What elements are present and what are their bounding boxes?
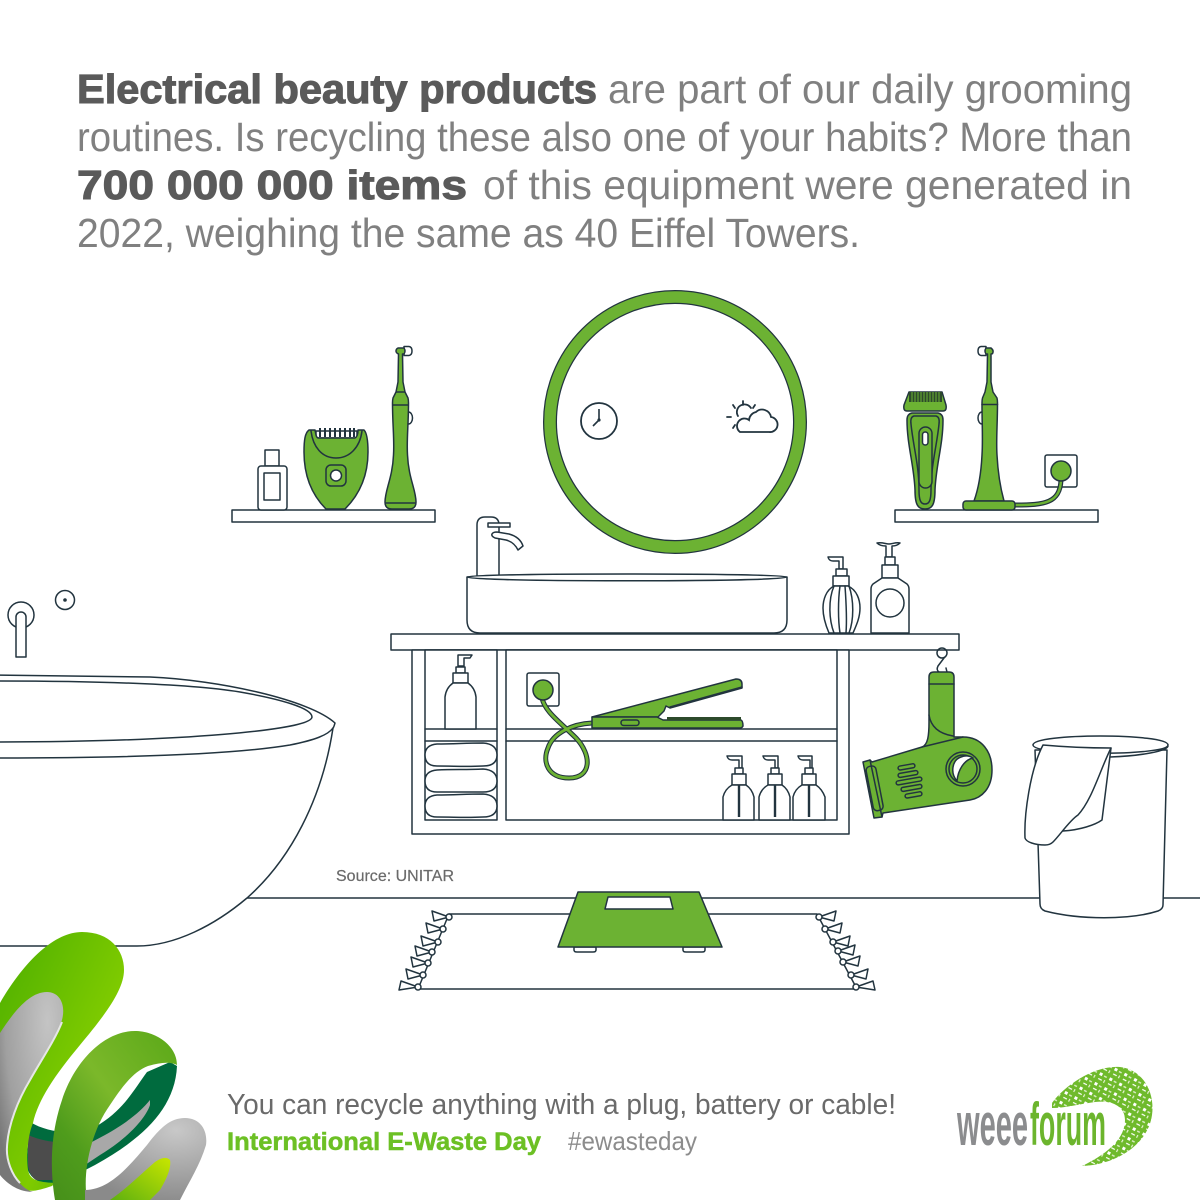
swirl: lower gray ribbon xyxy=(85,1118,206,1200)
heading text: are part of our daily grooming xyxy=(608,66,1132,112)
e-waste day swirl emblem xyxy=(0,932,206,1200)
swirl: large green ribbon xyxy=(0,932,124,1191)
pump bottle xyxy=(871,543,909,633)
heading text: of this equipment were generated in xyxy=(483,162,1132,208)
bath knob xyxy=(56,590,74,610)
footer message: You can recycle anything with a plug, battery or cable! xyxy=(227,1089,896,1121)
weeeforum logo: weee xyxy=(957,1091,1028,1158)
icon: sun and cloud xyxy=(727,401,778,432)
swirl: gray ribbon inside xyxy=(85,1100,150,1165)
towels xyxy=(425,743,497,817)
campaign name: International E-Waste Day xyxy=(227,1128,541,1156)
hashtag: #ewasteday xyxy=(568,1126,697,1156)
socket in cabinet xyxy=(527,673,559,706)
toothbrush left xyxy=(385,346,416,509)
left shelf xyxy=(232,510,435,522)
hair straightener xyxy=(533,679,743,778)
toothbrush on charger xyxy=(963,346,1015,510)
heading text: 2022, weighing the same as 40 Eiffel Towers. xyxy=(77,210,860,256)
epilator xyxy=(304,428,368,509)
swirl: large gray inner xyxy=(0,992,63,1192)
heading text: 700 000 000 items xyxy=(77,162,467,208)
shaver xyxy=(904,392,946,509)
bathtub xyxy=(0,675,335,946)
hair dryer xyxy=(863,648,992,818)
bathroom scale xyxy=(558,892,722,952)
mirror xyxy=(550,297,800,547)
three pump bottles xyxy=(723,756,825,820)
text: forum xyxy=(1030,1091,1106,1158)
rug xyxy=(399,911,875,990)
logo: mosaic crescent xyxy=(1052,1067,1153,1166)
floor line xyxy=(247,897,1200,899)
countertop xyxy=(391,634,959,650)
socket right xyxy=(1045,455,1077,487)
ribbed soap dispenser xyxy=(823,557,860,633)
basin faucet xyxy=(477,517,523,576)
power cable right xyxy=(1015,461,1071,505)
right shelf xyxy=(895,510,1098,522)
cabinet xyxy=(412,650,849,834)
heading text: Electrical beauty products xyxy=(77,66,597,112)
source note: Source: UNITAR xyxy=(336,868,454,885)
bottle in cubby xyxy=(445,655,476,729)
small bottle xyxy=(258,450,287,510)
swirl: front green ring xyxy=(52,1031,177,1200)
basin xyxy=(467,574,787,633)
swirl: lime tip xyxy=(110,1158,170,1200)
icon: clock xyxy=(581,403,617,439)
swirl: dark green back ribbon xyxy=(26,1062,177,1185)
bath faucet xyxy=(8,602,34,657)
heading text xyxy=(77,66,1132,256)
swirl: left interior shadow xyxy=(28,1135,60,1180)
weeeforum logo xyxy=(957,1067,1153,1166)
laundry bin xyxy=(1025,736,1168,918)
heading text: routines. Is recycling these also one of your habits? More than xyxy=(77,114,1132,160)
